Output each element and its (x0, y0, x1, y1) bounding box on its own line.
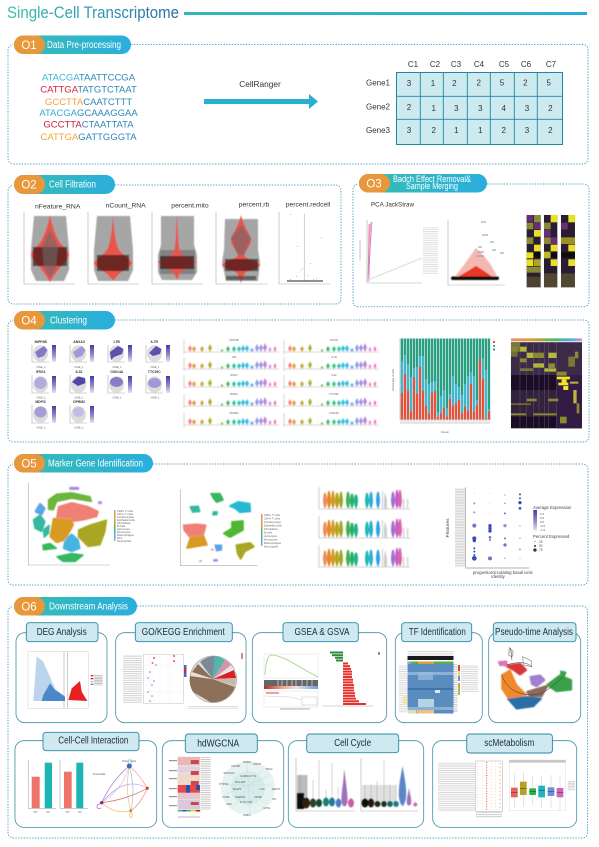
metabolism dot plot (438, 761, 502, 818)
violin grid: LTB (232, 355, 237, 359)
card: cell cycle (288, 734, 424, 827)
count matrix: 3 (478, 104, 483, 113)
bar charts: KO (78, 810, 82, 814)
badge: 05: Marker Gene Identification (48, 458, 143, 469)
chart: dot plot: Average Expression (533, 505, 572, 510)
co-expression network: THEMIS (235, 795, 245, 799)
chart: tSNE clusters: Astrocytes (117, 527, 131, 531)
chart: jackstraw (360, 220, 438, 283)
badge: 04: Clustering (50, 315, 87, 326)
badge: 01: O1 (21, 40, 37, 52)
feature plot: IL7R (146, 340, 170, 369)
badge: 01 (14, 36, 131, 54)
count matrix: C4 (474, 60, 485, 69)
co-expression network: IL7R CD6 (240, 800, 253, 804)
badge: 02: O2 (21, 180, 37, 192)
feature plot: IFSG1: IFSG1 (36, 370, 46, 374)
count matrix: 2 (476, 78, 481, 88)
chart: PC heatmaps (527, 215, 575, 287)
panel: 03 batch effect removal (353, 174, 589, 307)
co-expression network (219, 760, 281, 817)
panel: 05 marker gene identification (8, 454, 588, 585)
co-expression network: ZAP70 (272, 787, 281, 791)
badge: 04: O4 (21, 316, 37, 328)
cell cycle violins B (361, 758, 418, 811)
count matrix: Gene3 (366, 126, 391, 135)
violin grid: TTC39C (329, 392, 339, 396)
chart: variable features (448, 220, 505, 285)
card: hdWGCNA: hdWGCNA (197, 739, 239, 750)
badge: 06: Downstream Analysis (49, 601, 128, 612)
count matrix: 3 (407, 79, 412, 88)
count matrix: C3 (451, 60, 462, 69)
heading: PCA JackStraw: PCA JackStraw (371, 202, 414, 208)
card: DEG analysis: DEG Analysis (37, 627, 87, 638)
card: cell cycle: Cell Cycle (334, 738, 372, 749)
co-expression network: CD2 (226, 802, 232, 806)
badge: 03: Sample Merging (406, 181, 458, 191)
badge: 01: Data Pre-processing (47, 40, 121, 51)
violin grid (184, 338, 379, 427)
feature plot: CD014A: tSNE_1 (113, 396, 122, 400)
co-expression network: IKZF1 (243, 813, 251, 817)
count matrix: 1 (431, 79, 436, 88)
chart: tSNE clusters: Fibroblasts (117, 521, 131, 525)
violins: marker genes (319, 487, 410, 567)
card: hdWGCNA (162, 734, 284, 827)
violin grid: IFSG1 (230, 373, 238, 377)
feature plot: IL32: IL32 (76, 370, 83, 374)
feature plot: IL7R: tSNE_1 (151, 365, 160, 369)
count matrix: C6 (521, 60, 532, 69)
chart: UMAP clusters: Monocytes (264, 538, 278, 542)
card: cell-cell interaction: Cell-Cell Interaction (58, 735, 128, 746)
title rule (184, 12, 587, 15)
feature plot: OPRM2: tSNE_1 (75, 426, 84, 430)
co-expression network: LCK (259, 787, 265, 791)
sequence reads: GCCTTACTAATTATA (43, 120, 134, 131)
count matrix: Gene2 (366, 102, 391, 112)
co-expression network: CD247 (253, 762, 262, 766)
count matrix: 1 (454, 126, 459, 135)
co-expression network: PTPRC (219, 782, 229, 786)
enrichment curve (264, 654, 318, 710)
chart: tSNE clusters: Epithelial cells (117, 518, 135, 522)
count matrix: 2 (452, 79, 457, 88)
badge: 05 (14, 454, 153, 472)
card: DEG analysis (16, 623, 107, 723)
count matrix: C7 (546, 60, 557, 69)
violin grid: MDFIC (230, 392, 238, 396)
count matrix: 5 (546, 78, 551, 88)
panel: 01 data pre-processing (8, 36, 588, 164)
chart: dot plot (445, 487, 572, 579)
sequence reads: ATACGATAATTCCGA (42, 73, 136, 84)
feature plot: IL7R: IL7R (151, 340, 159, 344)
co-expression network: CD3E (254, 795, 262, 799)
metabolism box plot (509, 760, 575, 811)
chart: UMAP clusters: B cells (264, 530, 273, 534)
feature plot: ANXA3: ANXA3 (73, 340, 85, 344)
chart: UMAP clusters (180, 489, 282, 566)
chord diagram (188, 653, 243, 709)
chart: UMAP clusters: Keratinocytes (264, 520, 282, 524)
card: GSEA and GSVA: GSEA & GSVA (294, 627, 350, 638)
chart: dot plot: 0.5 (540, 516, 545, 520)
feature plot: OPRM2: OPRM2 (73, 400, 85, 404)
co-expression network: TRAC (265, 767, 273, 771)
interaction network: Other Cells (122, 759, 137, 763)
feature plot: IL32 (70, 370, 94, 400)
chart: cluster heatmap (511, 338, 582, 428)
chart: UMAP clusters: CD8+ T cells (264, 513, 281, 517)
chart: UMAP clusters: CD4+ T cells (264, 516, 281, 520)
feature plot: IFSG1: tSNE_1 (37, 396, 46, 400)
chart: dot plot: 0.0 (540, 520, 545, 524)
violin: percent.redcell: percent.redcell (286, 202, 331, 208)
feature plot: TTC39C (146, 370, 170, 400)
count matrix: C2 (430, 60, 441, 69)
count matrix: 3 (407, 126, 412, 135)
chart: tSNE clusters: Keratinocytes (117, 515, 135, 519)
violin grid: IL7R (331, 355, 337, 359)
co-expression network: BCL11B (235, 780, 245, 784)
chart: dot plot: Percent Expressed (533, 534, 570, 539)
feature plot: ANXA3: tSNE_1 (75, 365, 84, 369)
chart: dot plot: -0.5 (540, 524, 546, 528)
enrichment dot plot (123, 654, 186, 703)
panel: 04 clustering (8, 311, 589, 442)
chart: tSNE clusters: B cells (117, 524, 126, 528)
sequence reads: GCCTTACAATCTTT (45, 97, 132, 108)
count matrix: 2 (407, 103, 412, 112)
module heatmap (169, 757, 210, 817)
chart: dot plot: 75 (539, 548, 543, 552)
feature plot: INPP4B: INPP4B (35, 340, 47, 344)
card: cell-cell interaction (15, 732, 157, 827)
card: TF identification (395, 623, 482, 723)
chart: dot plot: 25 (539, 540, 543, 544)
chart: tSNE clusters: Macrophages (117, 533, 135, 537)
count matrix: 2 (431, 126, 436, 135)
feature plot: INPP4B (32, 340, 56, 369)
card: pseudo-time analysis: Pseudo-time Analysis (495, 627, 573, 638)
card: pseudo-time analysis (489, 623, 581, 723)
feature plot: ANXA3 (70, 340, 94, 369)
sequence reads (39, 73, 138, 143)
feature plot: MDFIC: tSNE_1 (37, 426, 46, 430)
chart: UMAP clusters: Epithelial cells (264, 524, 282, 528)
count matrix: C1 (408, 60, 419, 69)
co-expression network: ITK (272, 797, 276, 801)
card: GO/KEGG enrichment: GO/KEGG Enrichment (142, 627, 225, 638)
feature plot: LTB: tSNE_1 (113, 365, 122, 369)
violin grid: CD014A (329, 411, 339, 415)
chart: dot plot: 50 (539, 544, 543, 548)
feature plot: TTC39C: tSNE_1 (151, 396, 160, 400)
feature plot: MDFIC: MDFIC (35, 400, 47, 404)
volcano plot (28, 652, 103, 708)
badge: 03 (359, 174, 487, 192)
violin grid: INPP4B (229, 338, 239, 342)
co-expression network: CD96 (222, 795, 230, 799)
count matrix: C5 (499, 60, 510, 69)
violin: percent.redcell (279, 202, 331, 284)
card: scMetabolism: scMetabolism (484, 738, 534, 749)
violin grid: ANXA3 (330, 338, 339, 342)
count matrix: 3 (525, 104, 530, 113)
violin: percent.mito: percent.mito (171, 202, 209, 210)
TF heatmap (399, 650, 478, 714)
feature plot: LTB: LTB (114, 340, 120, 344)
bar charts: WT (66, 810, 70, 814)
co-expression network: ETS1 (264, 806, 271, 810)
bar charts: WT (34, 810, 38, 814)
count matrix: 1 (478, 126, 483, 135)
interaction network (93, 759, 149, 818)
violin grid: OPRM2 (229, 411, 239, 415)
feature plot: TTC39C: TTC39C (148, 370, 161, 374)
cell cycle violins A (296, 758, 355, 811)
badge: 06 (14, 597, 137, 616)
count matrix: 4 (501, 104, 506, 113)
feature plot: CD014A: CD014A (110, 370, 124, 374)
co-expression network: NFKB1 (231, 764, 241, 768)
badge: 04 (14, 311, 115, 330)
chart: stacked bars: Percentage of cells (391, 368, 395, 391)
feature plot: LTB (108, 340, 132, 369)
count matrix: 5 (500, 78, 505, 88)
chart: stacked bars: Cluster (441, 430, 449, 434)
co-expression network: SPOCK2 (223, 771, 235, 775)
violin: nCount_RNA (88, 202, 146, 284)
card: scMetabolism (433, 734, 577, 827)
feature plot: CD014A (108, 370, 132, 400)
count matrix: 3 (525, 126, 530, 135)
count matrix (366, 60, 562, 144)
count matrix: 2 (548, 104, 553, 113)
chart: UMAP clusters: Fibroblasts (264, 527, 278, 531)
chart: dot plot: progenitorcirculating basal ionic (473, 570, 534, 575)
chart: stacked bars (391, 338, 495, 434)
trajectory UMAP (498, 648, 572, 709)
chart: dot plot: Features (445, 518, 451, 537)
co-expression network: SKAP1 (232, 787, 242, 791)
sequence reads: CATTGAGATTGGGTA (40, 132, 137, 143)
chart: tSNE clusters: CD4+ T cells (117, 512, 134, 516)
sequence reads: ATACGAGCAAAGGAA (39, 108, 138, 119)
feature plot: INPP4B: tSNE_1 (37, 365, 46, 369)
bar charts: KO (46, 810, 50, 814)
badge: 03: Badch Effect Removal& (393, 174, 471, 184)
panel: 06 downstream analysis (8, 597, 588, 838)
count matrix: 2 (523, 78, 528, 88)
count matrix: 3 (454, 104, 459, 113)
violin: nFeature_RNA: nFeature_RNA (35, 204, 81, 210)
violin: nCount_RNA: nCount_RNA (106, 202, 146, 210)
co-expression network: CAMK4 FYN (240, 774, 256, 778)
feature plot: IL32: tSNE_1 (75, 396, 84, 400)
sequence reads: CATTGATATGTCTAAT (40, 85, 137, 96)
chart: tSNE clusters: DCs (117, 536, 123, 540)
chart: UMAP clusters: Macrophages (264, 541, 282, 545)
violin grid: IL32 (331, 373, 337, 377)
violin: percent.mito (152, 202, 209, 284)
badge: 06: O6 (21, 602, 37, 614)
badge: 05: O5 (21, 459, 37, 471)
chart: UMAP clusters: Astrocytes (264, 534, 278, 538)
violin: percent.rb: percent.rb (239, 202, 270, 208)
count matrix: 2 (501, 126, 506, 135)
violin: nFeature_RNA (24, 204, 81, 284)
violin: percent.rb (216, 202, 270, 284)
feature plot: IFSG1 (32, 370, 56, 400)
chart: dot plot: -1.0 (540, 528, 546, 532)
panel: 02 cell filtration (8, 175, 341, 304)
feature plot: MDFIC (32, 400, 56, 430)
chart: dot plot: 1.0 (540, 512, 545, 516)
chart: tSNE clusters: CD8+ T cells (117, 509, 134, 513)
badge: 02: Cell Filtration (49, 179, 96, 190)
badge: 03: O3 (366, 178, 382, 190)
co-expression network: RORA (243, 760, 251, 764)
title: Single-Cell Transcriptome (7, 4, 179, 22)
chart: dot plot: Identity (491, 574, 506, 579)
chart: tSNE clusters (28, 483, 135, 565)
label: CellRanger: CellRanger (239, 79, 281, 89)
GSVA bars (322, 652, 380, 706)
feature plot: OPRM2 (70, 400, 94, 430)
chart: UMAP clusters: Neutrophils (264, 544, 279, 548)
chart: tSNE clusters: Monocytes (117, 530, 131, 534)
arrow (204, 94, 318, 109)
count matrix: 2 (548, 126, 553, 135)
badge: 02 (14, 175, 115, 194)
interaction network: TranCells (93, 772, 106, 776)
bar charts (28, 760, 88, 814)
card: TF identification: TF Identification (409, 627, 466, 638)
count matrix: 1 (431, 104, 436, 113)
card: GSEA and GSVA (252, 623, 387, 723)
count matrix: Gene1 (366, 78, 391, 88)
chart: tSNE clusters: Neutrophils (117, 539, 132, 543)
card: GO/KEGG enrichment (116, 623, 246, 723)
